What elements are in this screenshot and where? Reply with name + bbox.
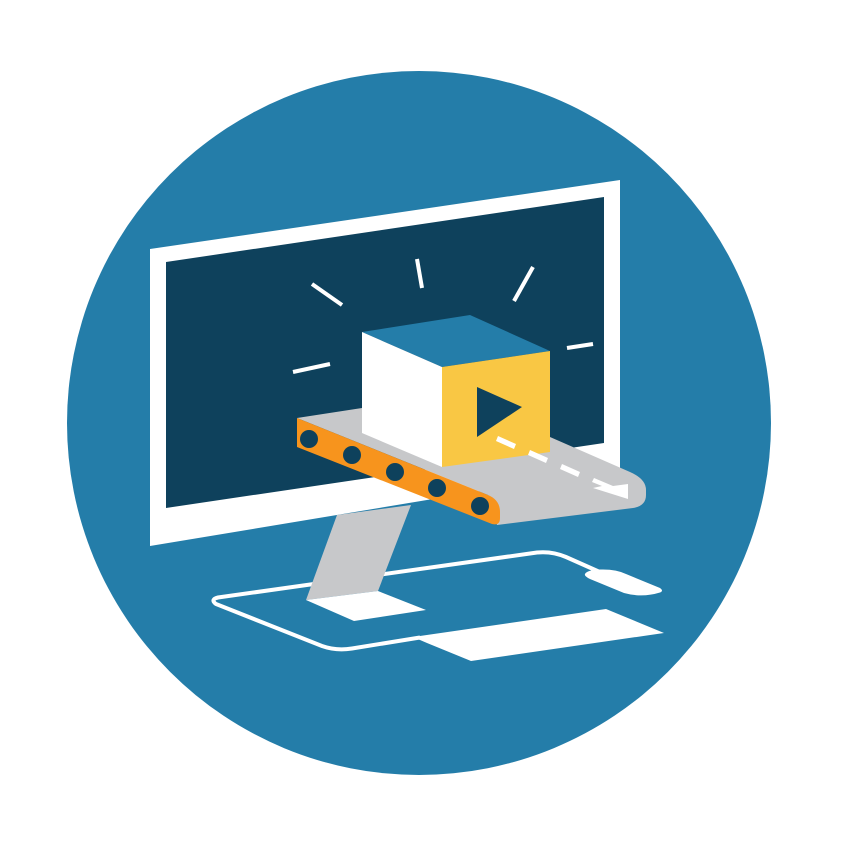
box left face (362, 332, 442, 467)
background circle (67, 71, 771, 775)
play icon (477, 387, 522, 437)
cable (213, 552, 602, 649)
dashed direction arrow (496, 436, 628, 499)
conveyor belt side (297, 418, 500, 524)
keyboard (413, 609, 664, 661)
rollers (300, 430, 489, 515)
monitor screen (166, 197, 604, 508)
burst rays (293, 259, 593, 372)
box top (362, 315, 550, 367)
stand base (306, 591, 426, 621)
box right face (442, 351, 550, 467)
conveyor belt surface (297, 408, 646, 525)
monitor stand (306, 505, 411, 600)
mouse (585, 569, 662, 595)
monitor frame (150, 180, 620, 546)
video box (362, 315, 550, 467)
